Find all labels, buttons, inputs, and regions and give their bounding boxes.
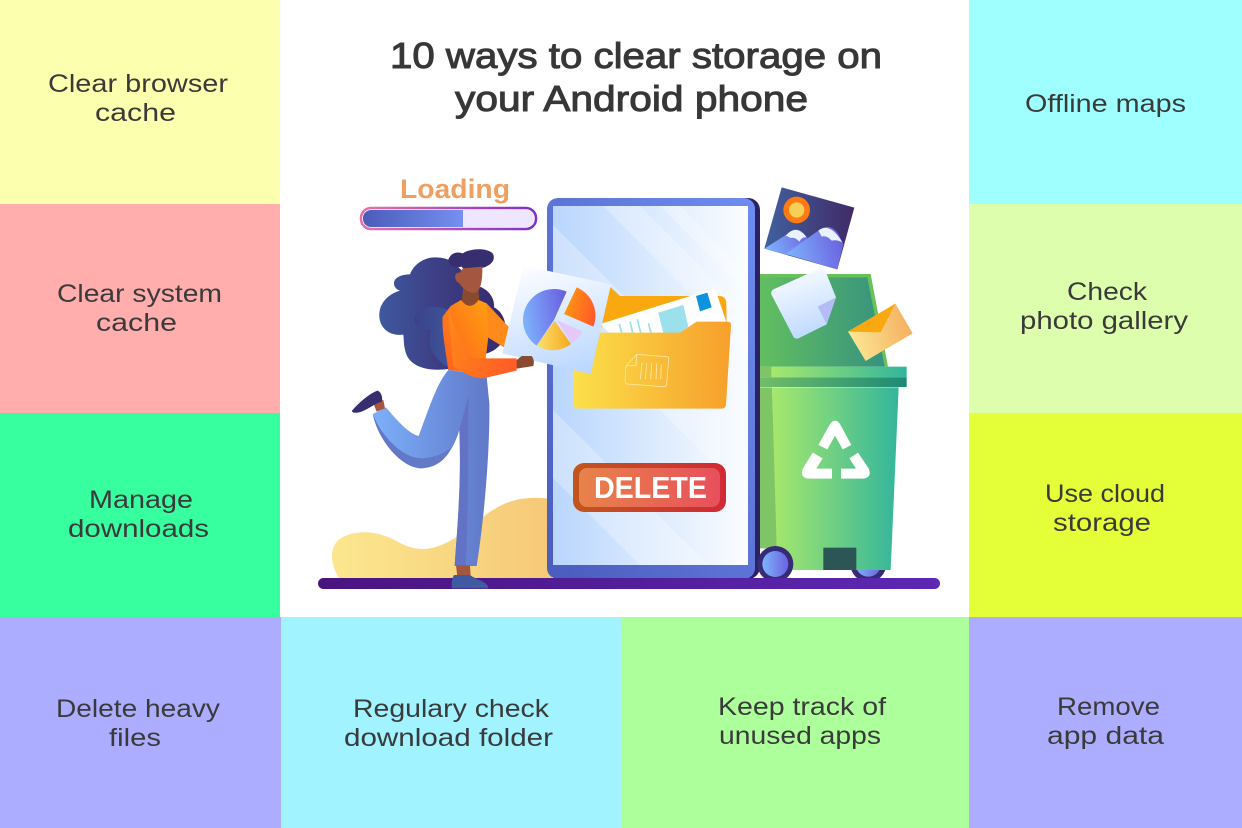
- loading progress bar: [361, 208, 536, 229]
- panel: clear browser cache: cache: [95, 99, 176, 127]
- panel: manage downloads: downloads: [68, 515, 209, 543]
- panel: regularly check download folder: download folder: [344, 724, 553, 752]
- panel: delete heavy files: files: [109, 724, 161, 752]
- panel: remove app data: app data: [1047, 722, 1164, 750]
- raised shoe: [352, 391, 385, 413]
- title: your Android phone: [455, 78, 808, 119]
- pants back leg: [373, 370, 489, 566]
- falling photo: [764, 187, 854, 269]
- phone: [547, 198, 760, 579]
- panel: manage downloads: [0, 413, 280, 617]
- panel: remove app data: [969, 617, 1242, 828]
- back arm sleeve: [487, 303, 510, 347]
- delete button: DELETE: [594, 470, 707, 505]
- panel: clear browser cache: Clear browser: [48, 70, 228, 98]
- panel: regularly check download folder: Regulary check: [353, 695, 550, 723]
- wheel: front: [757, 546, 793, 582]
- chart card: [502, 266, 611, 374]
- title: [390, 35, 882, 119]
- panel: clear system cache: [0, 204, 280, 413]
- title: 10 ways to clear storage on: [390, 35, 882, 76]
- panel: clear system cache: cache: [96, 309, 177, 337]
- panel: delete heavy files: Delete heavy: [56, 695, 221, 723]
- panel: delete heavy files: [0, 617, 281, 828]
- recycling bin: [760, 274, 907, 582]
- delete button: [573, 463, 726, 512]
- lighter hair lobes: [414, 307, 448, 367]
- panel: regularly check download folder: [281, 617, 621, 828]
- hair: [379, 257, 506, 370]
- panel: use cloud storage: Use cloud: [1045, 480, 1165, 508]
- panel: clear system cache: Clear system: [57, 280, 222, 308]
- ground line: [318, 578, 940, 589]
- panel: use cloud storage: [969, 413, 1242, 617]
- panel: clear browser cache: [0, 0, 280, 204]
- folder: [573, 287, 731, 409]
- hair top: [448, 249, 494, 269]
- hand: [516, 356, 534, 369]
- panel: remove app data: Remove: [1057, 693, 1160, 721]
- falling document: [771, 268, 836, 339]
- panel: offline maps: [969, 0, 1242, 204]
- panel: keep track of unused apps: unused apps: [719, 722, 881, 750]
- panel: keep track of unused apps: [621, 617, 969, 828]
- panel: check photo gallery: Check: [1067, 278, 1148, 306]
- panel: keep track of unused apps: Keep track of: [718, 693, 886, 721]
- standing foot: [452, 565, 488, 588]
- torso: [442, 300, 488, 378]
- panel: check photo gallery: photo gallery: [1020, 307, 1189, 335]
- panel: use cloud storage: storage: [1053, 509, 1151, 537]
- panel: check photo gallery: [969, 204, 1242, 413]
- loading label: Loading: [400, 174, 510, 204]
- panel: offline maps: Offline maps: [1025, 90, 1186, 118]
- woman with chart: [352, 249, 611, 588]
- background blob: [332, 498, 552, 578]
- panel: manage downloads: Manage: [89, 486, 193, 514]
- neck and face: [462, 287, 479, 307]
- falling envelope: [848, 304, 913, 361]
- front arm: [448, 310, 517, 378]
